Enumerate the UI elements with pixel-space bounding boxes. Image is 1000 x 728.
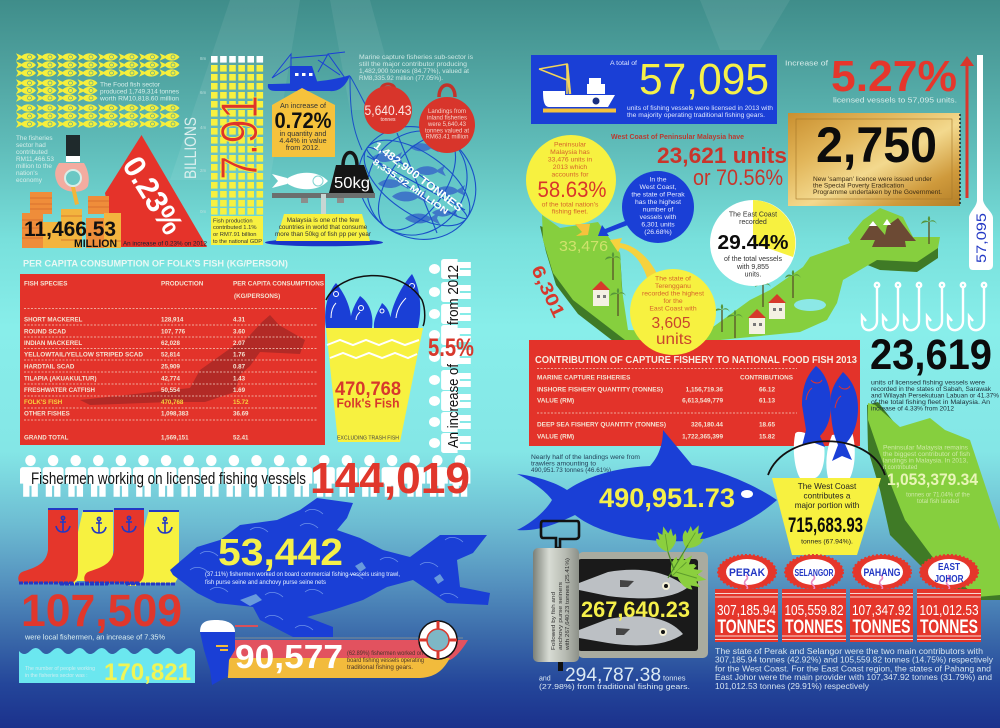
icon: west coast bucket: contributes a: [804, 492, 851, 500]
rotated text: An increase of: [445, 363, 462, 448]
bucket value: Folk's Fish: [336, 396, 400, 410]
icon: red weight landings: were 5,640.43: [427, 122, 467, 128]
table rows: 50,554: [161, 387, 180, 394]
icon: large blue fish: 490,951.73: [599, 483, 735, 513]
label: A total of: [610, 60, 637, 67]
heading: nearly half: 490,951.73 tonnes (46.61%): [531, 467, 611, 474]
map text: the biggest contributor of fish: [883, 452, 970, 458]
rotated text: [445, 265, 462, 448]
boat caption: traditional fishing gears.: [347, 664, 413, 671]
callout: Terengganu circle: units: [656, 331, 692, 348]
marine text: Marine capture fisheries sub-sector is: [359, 54, 474, 61]
billions label: BILLIONS: [181, 117, 200, 179]
badge: Selangor: SELANGOR: [794, 568, 834, 579]
table rows: FOLK'S FISH: [24, 399, 63, 406]
fish in bucket: [325, 274, 420, 328]
stat: 144,019: 144,019: [310, 454, 470, 503]
contribution text: contributed: [16, 149, 48, 156]
table rows: 128,914: [161, 316, 184, 324]
table rows: GRAND TOTAL: [24, 434, 69, 442]
stat: 5.27% increase: Increase of: [785, 58, 829, 68]
icon: trawler boat: [268, 52, 382, 150]
callout: Terengganu circle: 3,605: [652, 315, 691, 332]
badge: East Johor: TONNES: [920, 617, 978, 638]
icon: red weight landings: Landings from: [428, 109, 466, 115]
axis labels: 4m: [200, 125, 207, 130]
table body: INSHORE FISHERY QUANTITY (TONNES): [537, 386, 663, 394]
callout: east coast circle: [710, 200, 796, 286]
description: the majority operating traditional fishing gears.: [627, 112, 765, 119]
stat: 23,619: and Wilayah Persekutuan Labuan or 41.37%: [871, 392, 999, 400]
badge: Perak: PERAK: [729, 567, 765, 579]
table rows: INDIAN MACKEREL: [24, 340, 82, 347]
chart: GDP waffle: [181, 56, 269, 245]
callout: east coast circle: 29.44%: [718, 232, 789, 254]
axis labels: 8m: [200, 56, 207, 61]
callout: Terengganu circle: recorded the highest: [642, 290, 704, 298]
table rows: 62,028: [161, 340, 180, 347]
icon: scale with fish and 50kg weight: [272, 152, 375, 214]
stat: traditional gears: 294,787.38: [565, 665, 661, 686]
stat: 11,466.53 million: MILLION: [74, 238, 117, 250]
map text: it contributed: [883, 465, 917, 471]
lake: [794, 299, 826, 311]
table rows: 52.41: [233, 434, 249, 442]
table body: DEEP SEA FISHERY QUANTITY (TONNES): [537, 422, 666, 428]
table body: 61.13: [759, 398, 775, 404]
table rows: 1,098,383: [161, 410, 189, 418]
dotted lines: [24, 308, 318, 420]
contribution text: economy: [16, 177, 43, 184]
table header: [24, 280, 324, 300]
callout: peninsular malaysia circle: 33,476 units in: [548, 156, 592, 164]
table body: 1,156,719.36: [686, 386, 723, 394]
callout: 0.72%: in quantity and: [280, 129, 326, 138]
callout: Perak blue circle: vessels with: [640, 214, 677, 221]
food fish text: worth RM10,818.60 million: [99, 96, 179, 102]
waffle grid: [211, 56, 263, 215]
icon: west coast bucket: The West Coast: [798, 482, 857, 491]
badge: Perak: [715, 555, 778, 642]
callout: Terengganu circle: East Coast with: [649, 306, 697, 312]
callout: Perak blue circle: In the: [649, 176, 667, 184]
table rows: 1.43: [233, 376, 246, 382]
roll text: anchovy purse seiners: [558, 581, 564, 650]
arrow: yellow down: [575, 224, 590, 236]
stat: 23,619: increase of 4.33% from 2012: [871, 406, 954, 412]
fishermen label: Fishermen working on licensed fishing vessels: [31, 469, 306, 488]
table body: [537, 374, 794, 440]
table body: 66.12: [759, 386, 775, 394]
badge: Pahang: TONNES: [852, 617, 910, 638]
icon: oar: [969, 55, 993, 270]
table rows: FRESHWATER CATFISH: [24, 387, 95, 394]
icon: parsley: [653, 521, 709, 592]
GDP callout: Fish production: [213, 218, 253, 224]
heading: nearly half: trawlers amounting to: [531, 460, 597, 468]
map text: total fish landed: [917, 499, 959, 505]
icon: oar: 57,095: [974, 213, 989, 263]
stat: 57,095: [639, 55, 769, 104]
table rows: [24, 316, 249, 442]
heading: west coast units: West Coast of Peninsular Malaysia have: [611, 134, 744, 141]
heading: west coast units: [611, 134, 787, 190]
table header: (KG/PERSONS): [234, 293, 280, 300]
table body: 6,613,549,779: [682, 398, 723, 404]
stat: 11,466.53 million: 11,466.53: [24, 218, 116, 241]
table rows: 1,569,151: [161, 434, 189, 442]
GDP callout: [211, 216, 263, 245]
stat: 5.5%: 5.5%: [428, 334, 474, 362]
note: the Special Poverty Eradication: [813, 182, 904, 190]
table body: 15.82: [759, 434, 775, 440]
badge: East Johor: [917, 555, 981, 642]
boat caption: board fishing vessels operating: [347, 657, 424, 664]
roll text: with 267,640.23 tonnes (25.41%): [565, 558, 571, 650]
badge: Perak: 307,185.94: [717, 602, 776, 619]
bucket value: 470,768: [335, 379, 401, 400]
roll text: Followed by fish and: [551, 592, 557, 650]
stat: 7.91: 7.91: [211, 95, 269, 180]
icon: west coast bucket: [768, 441, 885, 555]
food fish text: [99, 82, 179, 102]
callout: Terengganu circle: Terengganu: [655, 283, 691, 290]
note: [813, 176, 942, 196]
rotated text: from 2012: [445, 265, 462, 325]
houses and palms: [592, 216, 937, 338]
contribution text: sector had: [16, 142, 46, 149]
stat: 5.27% increase: licensed vessels to 57,095 units.: [833, 96, 957, 104]
panel: consumption table: [20, 274, 325, 445]
callout: Perak blue circle: [622, 171, 694, 243]
table heading: CONTRIBUTION OF CAPTURE FISHERY TO NATIONAL FOOD FISH 2013: [535, 355, 857, 366]
badge: East Johor: JOHOR: [934, 573, 964, 585]
panel: food fish sector: [16, 53, 207, 250]
callout: Terengganu circle: The state of: [655, 276, 691, 282]
school caption: (37.11%) fishermen worked on board commercial fishing vessels using trawl,: [205, 571, 400, 578]
boat caption: [347, 650, 424, 671]
panel: marine capture: [265, 52, 498, 262]
caption: An increase of 0.23% on 2012: [123, 240, 207, 248]
text block: state contributors: for the West Coast. For the East Coast region, the states of Pahang and: [715, 664, 991, 674]
icon: motor boat: [200, 620, 468, 685]
icon: bucket of fish: [325, 274, 425, 442]
table rows: 2.07: [233, 340, 246, 347]
table rows: 42,774: [161, 376, 180, 382]
table rows: HARDTAIL SCAD: [24, 364, 75, 370]
contribution text: nation's: [16, 170, 38, 177]
callout: east coast circle: The East Coast: [729, 212, 777, 218]
illustration: Malaysia map: [540, 208, 940, 348]
stat: 107,509: 107,509: [21, 585, 182, 636]
badge: Selangor: TONNES: [785, 617, 843, 638]
table header: FISH SPECIES: [24, 280, 67, 288]
callout: Perak blue circle: number of: [643, 206, 673, 214]
callout: 0.72%: [272, 88, 335, 157]
icon: coin stacks: [22, 192, 121, 248]
illustration: school of fish forming big fish: [170, 498, 490, 637]
triangle: [105, 135, 207, 247]
icon: sardine can: [533, 521, 708, 671]
arrow: yellow to east coast: [610, 238, 658, 278]
local fishermen caption: were local fishermen, an increase of 7.35%: [24, 634, 165, 642]
food fish text: produced 1,749,314 tonnes: [100, 88, 179, 96]
icon: red weight landings: [419, 85, 475, 153]
table rows: SHORT MACKEREL: [24, 316, 83, 324]
text block: state contributors: [715, 647, 993, 691]
callout: 0.72%: from 2012.: [286, 143, 320, 152]
axis labels: [200, 56, 207, 214]
callout: Malaysia consumption: [265, 214, 383, 246]
stat: 23,619: 23,619: [870, 331, 992, 379]
callout: Malaysia consumption: countries in world that consume: [279, 224, 368, 231]
panel: water box 170,821: [19, 648, 195, 686]
map side shadow: [540, 226, 938, 348]
stat: 33,476: 33,476: [559, 238, 608, 255]
badge: Perak: TONNES: [718, 617, 776, 638]
callout: Malaysia consumption: more than 50kg of fish pp per year: [275, 231, 371, 238]
axis labels: 6m: [200, 90, 207, 95]
contribution text: RM11,466.53: [16, 156, 54, 163]
callout: Terengganu circle: for the: [663, 298, 683, 305]
marine text: [359, 54, 474, 82]
table header: PER CAPITA CONSUMPTIONS: [233, 280, 324, 288]
heading: nearly half: [531, 454, 640, 474]
callout: peninsular malaysia circle: Malaysia has: [550, 149, 590, 156]
axis labels: 2m: [200, 168, 207, 173]
table rows: 4.31: [233, 316, 246, 324]
text block: state contributors: The state of Perak and Selangor were the two main contributors with: [715, 647, 983, 656]
callout: peninsular malaysia circle: 2013 which: [553, 164, 587, 171]
description: [627, 105, 773, 119]
table rows: 470,768: [161, 399, 184, 406]
callout: peninsular malaysia circle: 58.63%: [538, 177, 606, 202]
heading: per capita: PER CAPITA CONSUMPTION OF FOLK'S FISH (KG/PERSON): [23, 258, 288, 268]
stat: 90,577: 90,577: [235, 638, 343, 675]
panel: water box 170,821: in the fisheries sector was :: [25, 673, 88, 679]
map land: [542, 208, 940, 340]
callout: east coast circle: with 9,855: [736, 264, 769, 271]
table rows: 0.87: [233, 364, 246, 370]
food fish text: The Food fish sector: [100, 82, 161, 88]
callout: peninsular malaysia circle: Peninsular: [554, 142, 587, 148]
icon: hooks: [862, 283, 986, 330]
stat: net labels: 8,335.92 MILLION: [371, 156, 450, 216]
callout: peninsular malaysia circle: fishing fleet.: [552, 208, 588, 216]
callout: Perak blue circle: has the highest: [635, 199, 681, 206]
callout: peninsular malaysia circle: of the total nation's: [542, 202, 599, 208]
bucket value: [335, 379, 401, 410]
rotated people with stat: [428, 259, 474, 453]
table rows: 25,909: [161, 364, 180, 370]
icon: scale with fish and 50kg weight: 50kg: [334, 175, 370, 192]
heading: west coast units: 23,621 units: [657, 143, 787, 168]
text block: state contributors: 307,185.94 tonnes (42.92%) and 105,559.82 tonnes (14.75%) respectively: [715, 656, 993, 664]
callout: Perak blue circle: 6,301 units: [641, 222, 675, 228]
map text: tonnes or 71.04% of the: [906, 492, 971, 498]
heading: nearly half: Nearly half of the landings were from: [531, 454, 640, 461]
table rows: YELLOWTAIL/YELLOW STRIPED SCAD: [24, 352, 144, 358]
school caption: [205, 571, 400, 586]
icon: hand dropping coin: [55, 135, 89, 205]
map silhouette: [80, 315, 305, 405]
table body: 326,180.44: [691, 422, 723, 428]
stat: 5.27% increase: 5.27%: [831, 52, 957, 101]
panel: water box 170,821: 170,821: [104, 659, 191, 686]
map text: [883, 446, 971, 505]
table rows: TILAPIA (AKUAKULTUR): [24, 376, 97, 382]
stat: 53,442: 53,442: [218, 532, 343, 574]
contribution text: The fisheries: [16, 135, 53, 142]
callout: Malaysia consumption: Malaysia is one of the few: [287, 217, 360, 224]
people row: fishermen: [20, 454, 470, 503]
table rows: 15.72: [233, 399, 249, 406]
stat: traditional gears: [539, 665, 690, 691]
badge: Selangor: 105,559.82: [784, 602, 844, 619]
roll text: [551, 558, 571, 650]
icon: west coast bucket: major portion with: [795, 501, 860, 510]
table body: VALUE (RM): [537, 398, 574, 404]
callout: 0.72%: An increase of: [280, 101, 326, 110]
icon: large blue fish: [517, 430, 777, 541]
badge: Selangor: [782, 555, 846, 642]
stat: 23,619: units of licensed fishing vessels were: [871, 380, 985, 386]
GDP callout: or RM7.91 billion: [213, 232, 256, 238]
stat: 6,301: 6,301: [527, 262, 569, 321]
table body: VALUE (RM): [537, 434, 574, 440]
badge: Pahang: 107,347.92: [852, 602, 911, 619]
arrow: red up: [960, 56, 974, 198]
callout: peninsular malaysia circle: [526, 135, 616, 225]
badge: Pahang: [850, 555, 913, 642]
mountains: [860, 218, 916, 247]
stat: traditional gears: and: [539, 676, 551, 682]
GDP callout: to the national GDP: [213, 239, 262, 245]
stat: 23,619: of the total fishing fleet in Malaysia. An: [871, 399, 990, 406]
school caption: fish purse seine and anchovy purse seine nets: [205, 579, 326, 586]
lifebuoy: [419, 621, 457, 659]
panel: water box 170,821: The number of people working: [25, 666, 95, 672]
illustration: peninsula map and text: [867, 402, 1000, 600]
icon: red weight 5,640.43: [364, 84, 412, 134]
icon: red weight landings: tonnes valued at: [425, 128, 469, 134]
map text: Peninsular Malaysia remains: [883, 446, 968, 452]
table body: 18.65: [759, 422, 775, 428]
callout: east coast circle: units.: [745, 272, 761, 278]
callout: 0.72%: 0.72%: [274, 108, 332, 133]
text block: state contributors: 101,012.53 tonnes (29.91%) respectively: [715, 682, 869, 691]
icon: hanging fish: [794, 366, 858, 478]
callout: Terengganu circle: [630, 269, 716, 355]
marine text: RM8,335.92 million (77.05%).: [359, 75, 443, 82]
callout: east coast circle: of the total vessels: [724, 256, 782, 263]
GDP callout: contributed 1.1%: [213, 225, 257, 231]
stat: traditional gears: (27.98%) from traditional fishing gears.: [539, 682, 690, 691]
panel: golden ticket 2,750: [788, 113, 960, 206]
table rows: ROUND SCAD: [24, 328, 66, 336]
icon: boots: [18, 509, 179, 586]
icon: west coast bucket: tonnes (67.94%).: [801, 538, 853, 546]
icon: fishing boat: [539, 64, 616, 112]
stat: 5.27% increase: [785, 52, 957, 104]
sardines: [579, 570, 687, 645]
panel: contribution table: [529, 340, 860, 446]
table rows: 36.69: [233, 410, 249, 418]
badge: East Johor: 101,012.53: [920, 602, 978, 619]
contribution text: million to the: [16, 163, 52, 170]
boat caption: (62.89%) fishermen worked on: [347, 650, 423, 657]
stat: 23,619: recorded in the states of Sabah, Sarawak: [871, 386, 992, 393]
badge: East Johor: EAST: [938, 561, 960, 573]
icon: net with fish: [336, 104, 498, 262]
icon: red weight 5,640.43: tonnes: [380, 117, 396, 123]
heading: west coast units: or 70.56%: [693, 165, 783, 190]
stat: 23,619: [870, 331, 999, 412]
icon: west coast bucket: 715,683.93: [788, 514, 863, 537]
callout: east coast circle: recorded: [739, 219, 767, 226]
callout: Perak blue circle: West Coast,: [640, 184, 677, 191]
note: Programme undertaken by the Government.: [813, 189, 942, 196]
contribution text: [16, 135, 54, 184]
callout: Perak blue circle: (26.68%): [644, 229, 672, 236]
note: New 'sampan' licence were issued under: [813, 176, 932, 183]
stat: 0.23%: 0.23%: [116, 150, 190, 241]
callout: 0.72%: 4.44% in value: [279, 136, 327, 145]
badge: Pahang: PAHANG: [864, 567, 900, 579]
table rows: 1.76: [233, 352, 246, 358]
table rows: 3.60: [233, 328, 246, 336]
icon: red weight landings: RM63.41 million: [425, 134, 469, 140]
table rows: 52,814: [161, 352, 180, 358]
text block: state contributors: East Johor were the main provider with 107,347.92 tonnes (31.79%) and: [715, 673, 992, 682]
table body: 1,722,365,399: [682, 434, 723, 440]
table header: PRODUCTION: [161, 280, 204, 288]
panel: 57,095 vessels: [531, 55, 777, 124]
stat: traditional gears: tonnes: [663, 674, 686, 682]
stat: 2,750: [816, 117, 937, 173]
axis labels: 0m: [200, 209, 207, 214]
fish rows icon: [16, 53, 180, 128]
icon: red weight 5,640.43: 5,640.43: [364, 103, 412, 118]
table body: CONTRIBUTIONS: [740, 374, 794, 382]
stat: 267,640.23: 267,640.23: [581, 597, 690, 622]
description: units of fishing vessels were licensed in 2013 with: [627, 105, 773, 112]
table rows: 107, 776: [161, 328, 186, 336]
marine text: 1,482,900 tonnes (84.77%), valued at: [359, 68, 469, 75]
table rows: OTHER FISHES: [24, 410, 70, 418]
table rows: 1.69: [233, 387, 246, 394]
stat: net labels: 1,482,900 TONNES: [371, 140, 465, 214]
map text: landings in Malaysia. In 2013,: [883, 458, 968, 464]
arrow: blue to west coast: [598, 221, 628, 236]
stat: 1,053,379.34: [887, 470, 978, 489]
callout: Perak blue circle: the state of Perak: [631, 192, 685, 198]
icon: red weight landings: inland fisheries: [427, 116, 467, 122]
table body: MARINE CAPTURE FISHERIES: [537, 374, 631, 382]
callout: peninsular malaysia circle: accounts for: [551, 172, 589, 178]
bucket note: EXCLUDING TRASH FISH: [337, 436, 399, 442]
marine text: still the major contributor producing: [359, 61, 467, 68]
